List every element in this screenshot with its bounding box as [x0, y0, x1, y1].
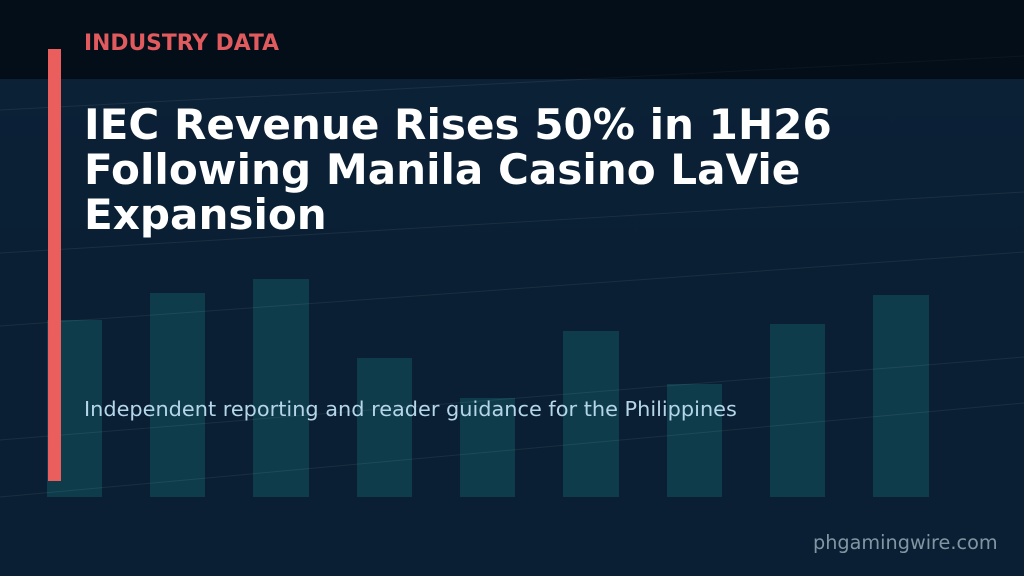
source domain: phgamingwire.com [813, 531, 998, 554]
bar chart [47, 279, 929, 497]
title [84, 100, 832, 239]
title: Following Manila Casino LaVie [84, 145, 800, 194]
accent bar [48, 49, 61, 481]
subtitle: Independent reporting and reader guidance for the Philippines [84, 397, 737, 421]
title: Expansion [84, 190, 327, 239]
category label: INDUSTRY DATA [84, 31, 279, 56]
title: IEC Revenue Rises 50% in 1H26 [84, 100, 832, 149]
header band [0, 0, 1024, 79]
